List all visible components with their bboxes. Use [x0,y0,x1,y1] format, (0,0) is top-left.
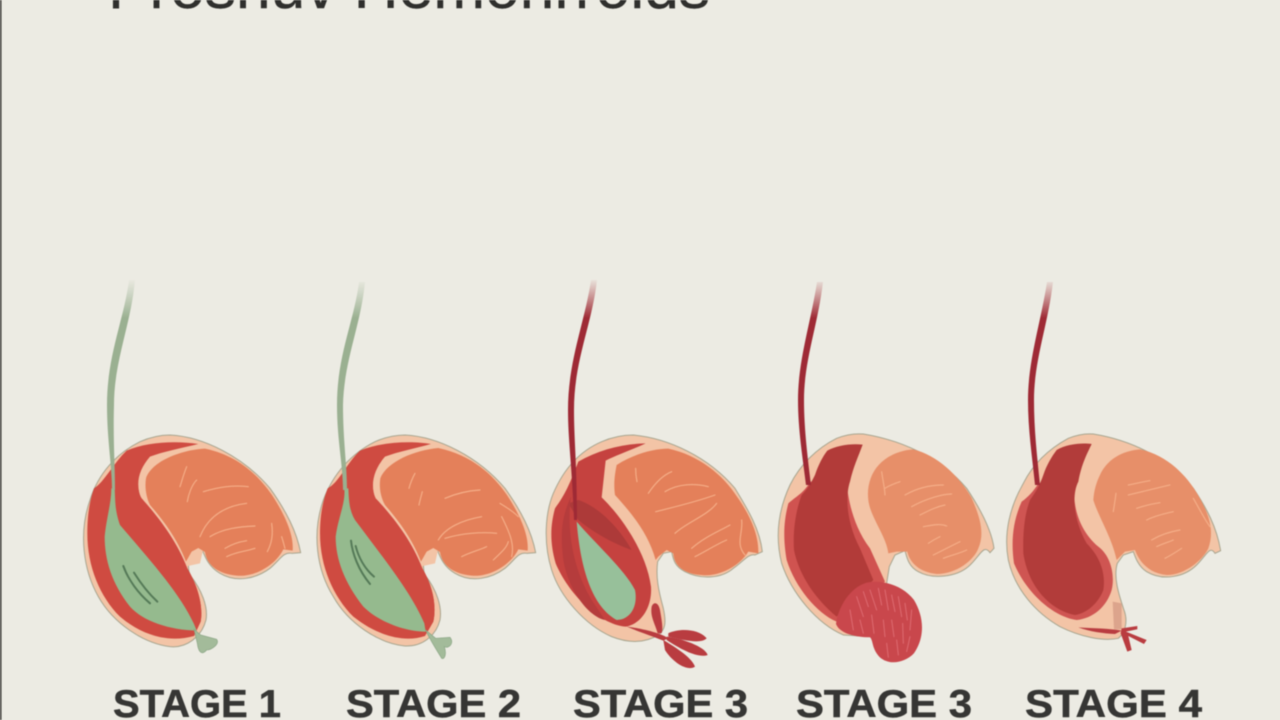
stage 1 anatomy [84,435,301,653]
panel: stage 1 [84,280,301,720]
panel: stage 3 [546,280,762,720]
mucosal folds [351,541,374,584]
panel: stage 4 [1007,282,1221,720]
muscle fibres [409,473,518,560]
dark lumen [794,444,873,617]
stage 4 tube [1028,282,1053,485]
muscle fibres [882,472,967,558]
stage 2 tube [337,282,365,490]
stage 3 anatomy [546,435,762,668]
prolapsed vessels [627,603,708,668]
panel: stage 2 [317,282,536,720]
stage 4 anatomy [1007,434,1221,652]
muscle fibres [1113,481,1210,558]
stage 2 anatomy [317,435,536,659]
stage 3 prolapse tube [798,282,823,485]
tail [426,630,452,659]
lumen green [577,522,636,620]
stage 3 tube [568,280,597,520]
panel: stage 3 prolapse [778,282,994,720]
muscle fibres [636,468,745,557]
stage 3 prolapse anatomy [778,434,994,662]
stage 1 tube [107,280,135,490]
prolapsed mass [836,582,922,662]
lumen green [105,488,197,631]
vessels [1078,602,1147,652]
tail [194,629,217,653]
muscle fibres [180,467,285,557]
mucosal folds [123,566,157,603]
dark lumen [1023,444,1104,615]
lumen green [336,488,426,632]
